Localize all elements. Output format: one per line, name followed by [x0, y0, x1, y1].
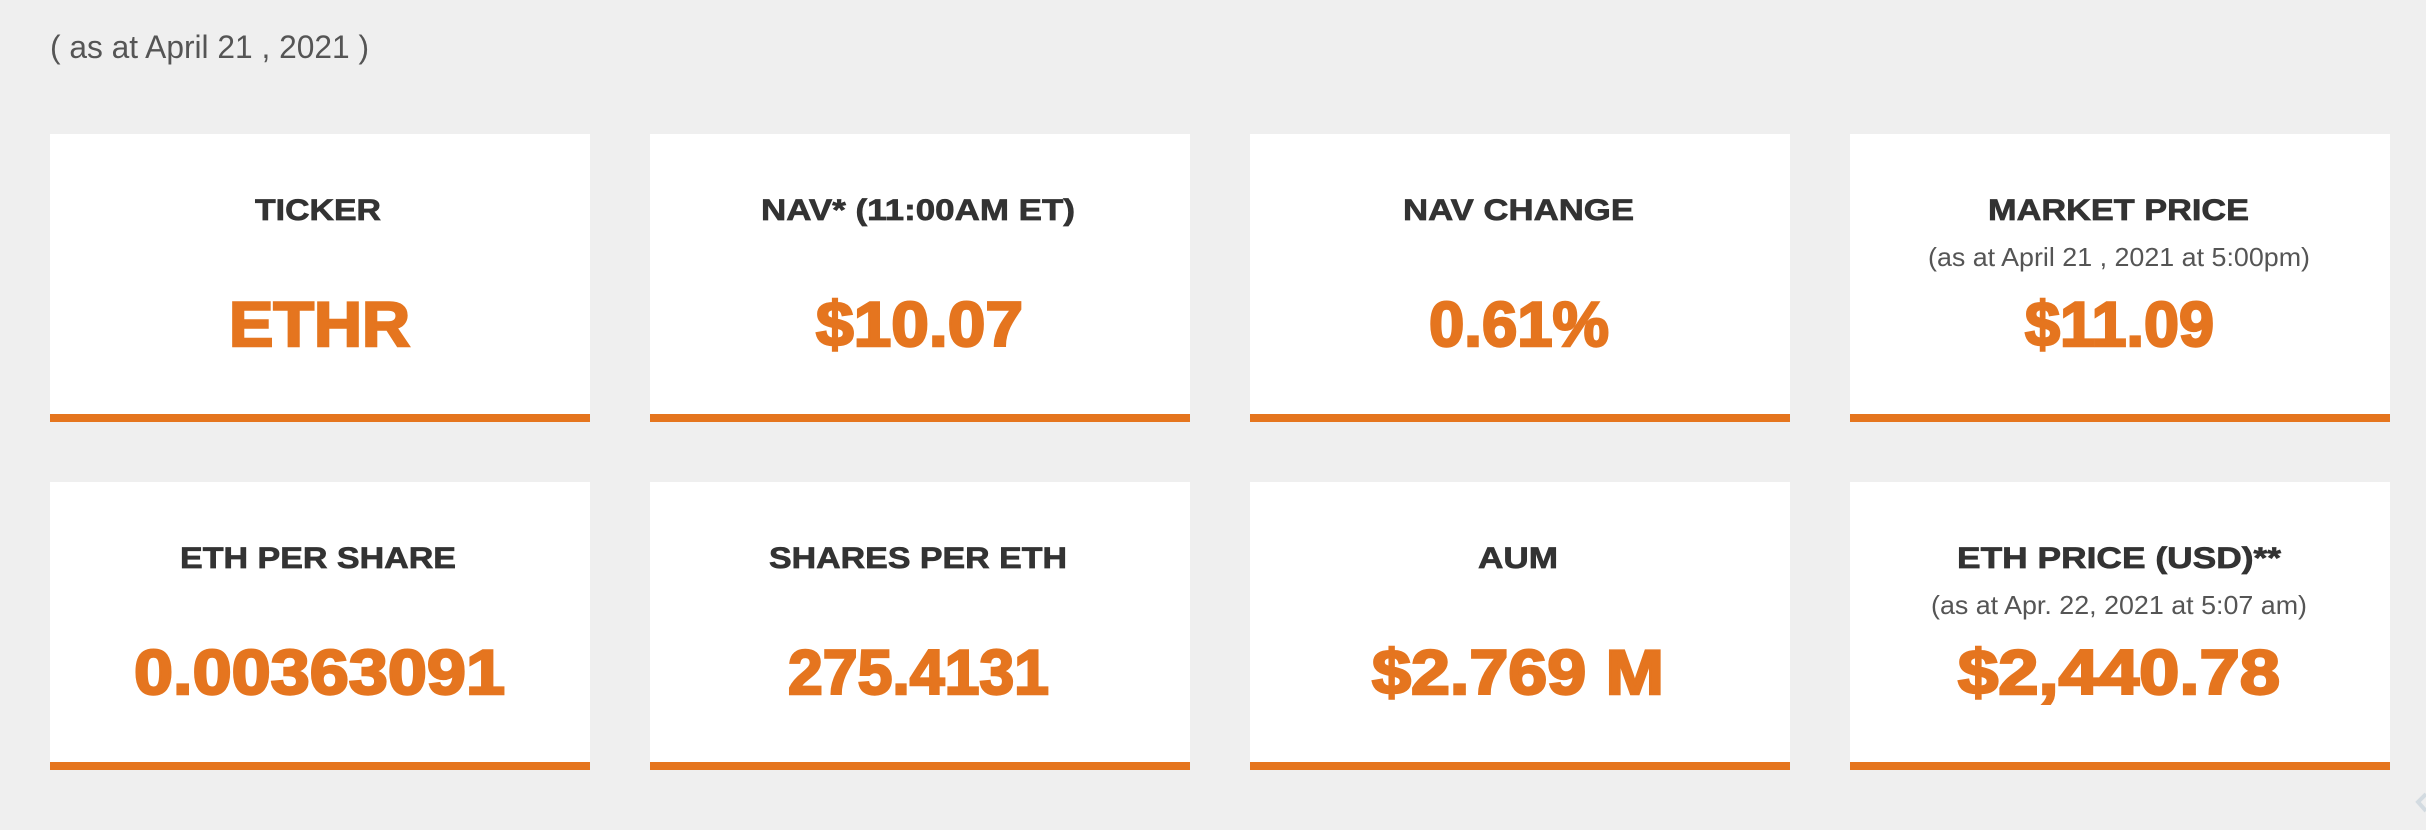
panel: NAV change [1250, 134, 1790, 422]
label: shares per ETH: SHARES PER ETH [769, 542, 1067, 575]
label: ETH price: ETH PRICE (USD)** [1957, 542, 2281, 575]
panel: ticker [50, 134, 590, 422]
note: ETH price date: (as at Apr. 22, 2021 at 5:07 am) [1931, 590, 2307, 620]
label: ETH per share: ETH PER SHARE [180, 542, 456, 575]
value: shares per ETH: 275.4131 [788, 638, 1049, 708]
label: AUM: AUM [1478, 542, 1558, 575]
panel: AUM [1250, 482, 1790, 770]
value: ticker: ETHR [229, 290, 410, 360]
value: NAV change: 0.61% [1429, 290, 1609, 360]
label: NAV change: NAV CHANGE [1403, 194, 1634, 227]
panel: shares per ETH [650, 482, 1190, 770]
value: ETH per share: 0.00363091 [134, 638, 505, 708]
value: ETH price: $2,440.78 [1958, 638, 2280, 708]
icon: corner chevron [2418, 794, 2426, 811]
value: NAV: $10.07 [816, 290, 1023, 360]
panel: market price [1850, 134, 2390, 422]
panel: ETH price [1850, 482, 2390, 770]
panel: NAV [650, 134, 1190, 422]
date heading: ( as at April 21 , 2021 ) [50, 29, 369, 65]
value: market price: $11.09 [2025, 290, 2214, 360]
note: market price date: (as at April 21 , 2021 at 5:00pm) [1928, 242, 2310, 272]
label: market price: MARKET PRICE [1988, 194, 2249, 227]
label: ticker: TICKER [255, 194, 381, 227]
panel: ETH per share [50, 482, 590, 770]
label: NAV: NAV* (11:00AM ET) [761, 194, 1075, 227]
value: AUM: $2.769 M [1372, 638, 1664, 708]
